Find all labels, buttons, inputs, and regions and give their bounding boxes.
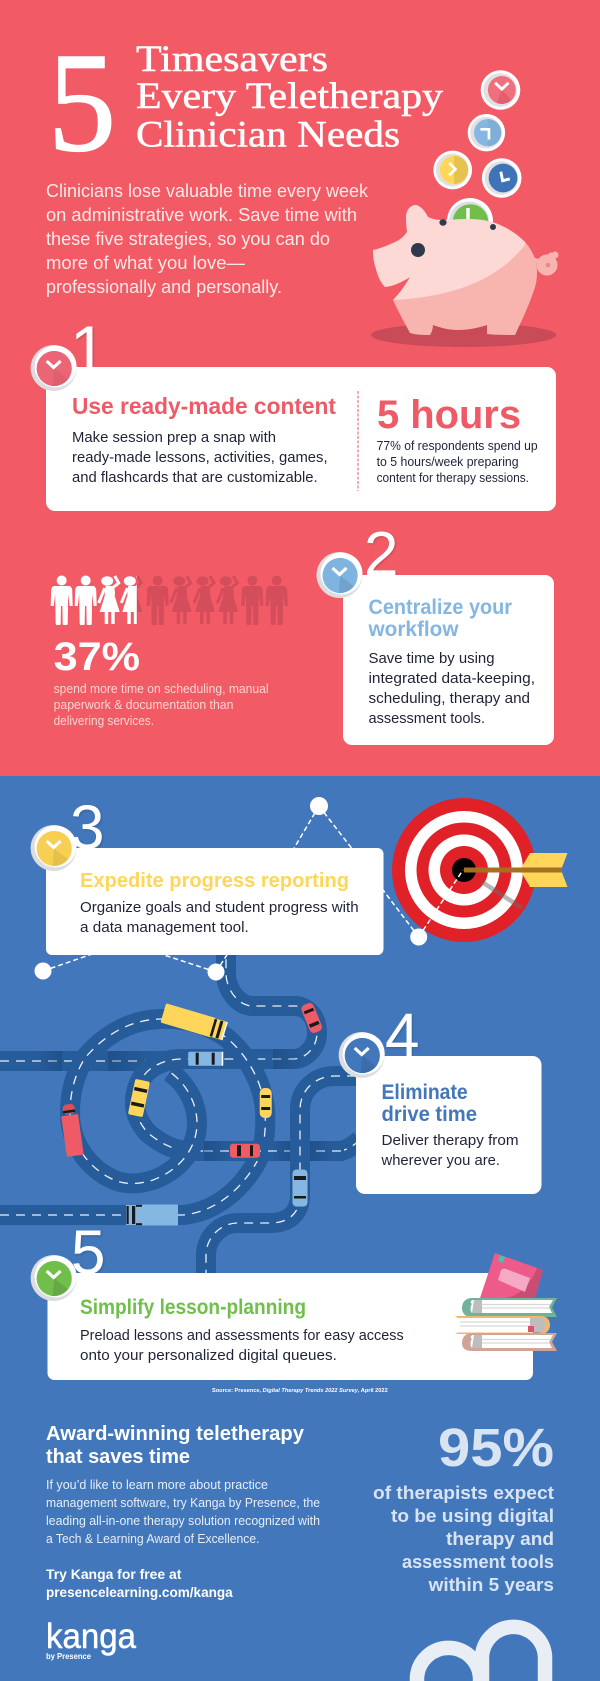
- stat description: 95%: to be using digital: [391, 1506, 554, 1526]
- call to action: presencelearning.com/kanga: [46, 1584, 233, 1600]
- card body text: integrated data-keeping,: [368, 670, 535, 687]
- icon: light blue coin: [468, 114, 505, 151]
- card body text: and flashcards that are customizable.: [72, 469, 318, 486]
- logo mark: presence arches: [417, 1627, 545, 1681]
- icon: stack of books: [455, 1253, 557, 1351]
- pig shadow: [371, 323, 556, 347]
- pig coin: [447, 198, 493, 222]
- intro text block: more of what you love—: [46, 253, 245, 273]
- intro text block: [46, 181, 369, 297]
- vehicle: yellow car right: [260, 1088, 272, 1118]
- brown book: [462, 1333, 557, 1351]
- people icon row: [51, 576, 288, 625]
- title: Clinician Needs: [136, 114, 400, 156]
- orange book: [455, 1316, 550, 1334]
- card body text: wherever you are.: [381, 1152, 500, 1169]
- heading: award-winning teletherapy: Award-winning teletherapy: [46, 1423, 305, 1445]
- road: inner loop overpass: [135, 1059, 205, 1105]
- step number 3: 3: [70, 794, 104, 862]
- dim figures: [121, 576, 288, 625]
- heading: eliminate drive time: [382, 1081, 477, 1126]
- intro text block: Clinicians lose valuable time every week: [46, 181, 369, 201]
- intro text block: on administrative work. Save time with: [46, 205, 357, 225]
- pink standing book: [480, 1253, 543, 1298]
- road: lower crossing: [204, 1141, 344, 1161]
- icon: target with arrow: [392, 798, 568, 942]
- heading: expedite progress reporting: Expedite progress reporting: [80, 869, 349, 892]
- dashed network connectors: [34, 797, 463, 980]
- closing body text: [46, 1478, 320, 1546]
- stat description: 77% of respondents spend up: [377, 439, 538, 453]
- stat: 95%: 95%: [438, 1418, 554, 1478]
- card body text: Organize goals and student progress with: [80, 899, 359, 916]
- intro text block: these five strategies, so you can do: [46, 229, 330, 249]
- heading: eliminate drive time: drive time: [382, 1103, 477, 1126]
- stat description: 95%: of therapists expect: [373, 1483, 554, 1503]
- icon: blue clock step 4: [339, 1032, 385, 1078]
- panel: step 2 card: [343, 575, 554, 745]
- stat description: content for therapy sessions.: [377, 471, 529, 485]
- card body text: Save time by using: [368, 650, 494, 667]
- stat description: [377, 439, 538, 485]
- panel: step 1 card: [46, 367, 556, 511]
- logo: kanga by Presence: by Presence: [46, 1651, 91, 1661]
- source note: Source: Presence, Digital Therapy Trends 2022 Survey, April 2022: [212, 1388, 388, 1394]
- logo: kanga by Presence: kanga: [46, 1617, 136, 1656]
- heading: simplify lesson-planning: Simplify lesson-planning: [80, 1296, 306, 1319]
- stat description: to 5 hours/week preparing: [377, 455, 519, 469]
- icon: yellow coin: [433, 151, 472, 189]
- icon: red coin: [481, 70, 520, 110]
- icon: piggy bank: [371, 198, 558, 347]
- card body text: Deliver therapy from: [382, 1132, 518, 1149]
- heading: award-winning teletherapy: that saves time: [46, 1446, 190, 1468]
- icon: red clock step 1: [31, 345, 77, 391]
- icon: dark blue coin: [482, 158, 522, 198]
- road: inner loop and top winding road: [135, 950, 360, 1151]
- intro text block: professionally and personally.: [46, 277, 282, 297]
- blue background section: [0, 776, 600, 1681]
- arrow shadow: [482, 882, 522, 908]
- stat description: 37%: [54, 682, 269, 728]
- heading: eliminate drive time: Eliminate: [382, 1081, 468, 1104]
- card body text: onto your personalized digital queues.: [80, 1347, 337, 1364]
- card body text: [80, 899, 359, 936]
- closing body text: leading all-in-one therapy solution recognized with: [46, 1514, 320, 1528]
- call to action: Try Kanga for free at: [46, 1566, 182, 1582]
- coral background section: [0, 0, 600, 776]
- stat: 5 hours: 5 hours: [377, 393, 521, 437]
- closing body text: management software, try Kanga by Presence, the: [46, 1496, 320, 1510]
- arrow fletching: [520, 853, 568, 887]
- white figures: [51, 576, 120, 625]
- heading: centralize your workflow: workflow: [368, 618, 459, 641]
- stat description: 95%: [373, 1483, 554, 1595]
- title: [48, 23, 444, 181]
- icon: falling clock coins: [433, 70, 522, 198]
- stat description: 95%: within 5 years: [428, 1575, 554, 1595]
- card body text: ready-made lessons, activities, games,: [72, 449, 328, 466]
- stat description: 37%: spend more time on scheduling, manual: [54, 682, 269, 696]
- stat: 37%: 37%: [54, 635, 140, 679]
- pig tail: [531, 252, 558, 276]
- vehicle: red car horizontal: [230, 1144, 260, 1158]
- closing body text: If you’d like to learn more about practice: [46, 1478, 268, 1492]
- closing body text: a Tech & Learning Award of Excellence.: [46, 1532, 260, 1546]
- heading: centralize your workflow: [368, 596, 512, 641]
- road: right vertical winding road: [206, 1076, 360, 1280]
- vehicle: yellow truck: [160, 1003, 228, 1041]
- heading: use ready-made content: Use ready-made content: [72, 393, 336, 419]
- stat description: 37%: delivering services.: [54, 714, 154, 728]
- panel: step 5 card: [48, 1273, 533, 1380]
- step number 2: 2: [364, 520, 398, 589]
- stat description: 95%: assessment tools: [402, 1552, 554, 1572]
- card body text: assessment tools.: [368, 710, 485, 727]
- pig eye: [411, 243, 425, 257]
- heading: award-winning teletherapy: [46, 1423, 305, 1468]
- call to action: [46, 1566, 233, 1600]
- card body text: [80, 1327, 404, 1364]
- card body text: scheduling, therapy and: [368, 690, 530, 707]
- card body text: Preload lessons and assessments for easy access: [80, 1327, 404, 1344]
- vehicle: red car top right: [300, 1002, 323, 1034]
- step number 1: 1: [70, 312, 107, 386]
- arrow shaft: [464, 868, 562, 872]
- pig body: [373, 205, 537, 335]
- card body text: Make session prep a snap with: [72, 429, 276, 446]
- title: Every Teletherapy: [136, 76, 444, 117]
- vehicle: yellow car left: [128, 1079, 150, 1117]
- vehicle: red truck: [60, 1103, 84, 1157]
- card body text: [381, 1132, 518, 1169]
- panel: step 4 card: [356, 1056, 542, 1194]
- icon: green clock step 5: [31, 1255, 77, 1301]
- vehicle: blue truck: [126, 1204, 178, 1226]
- vehicle: blue car vertical: [292, 1170, 308, 1206]
- icon: yellow clock step 3: [31, 825, 77, 871]
- card body text: a data management tool.: [80, 919, 249, 936]
- card body text: [72, 429, 328, 486]
- step number 5: 5: [71, 1218, 105, 1288]
- heading: centralize your workflow: Centralize your: [368, 596, 512, 619]
- road: left horizontal: [0, 1051, 165, 1071]
- vehicle: blue car: [188, 1052, 223, 1066]
- road network: [0, 950, 360, 1280]
- partially filled figure: [120, 576, 137, 624]
- title: Timesavers: [136, 39, 328, 80]
- stat description: 95%: therapy and: [446, 1529, 554, 1549]
- panel: step 3 card: [46, 848, 384, 955]
- step number 4: 4: [385, 1002, 419, 1070]
- card body text: [368, 650, 535, 727]
- title: 5: [48, 23, 116, 181]
- teal book: [462, 1298, 557, 1317]
- pig slot: [439, 219, 496, 230]
- road: big spiral loop: [0, 1019, 265, 1215]
- stat description: 37%: paperwork & documentation than: [54, 698, 233, 712]
- icon: blue clock step 2: [316, 552, 362, 598]
